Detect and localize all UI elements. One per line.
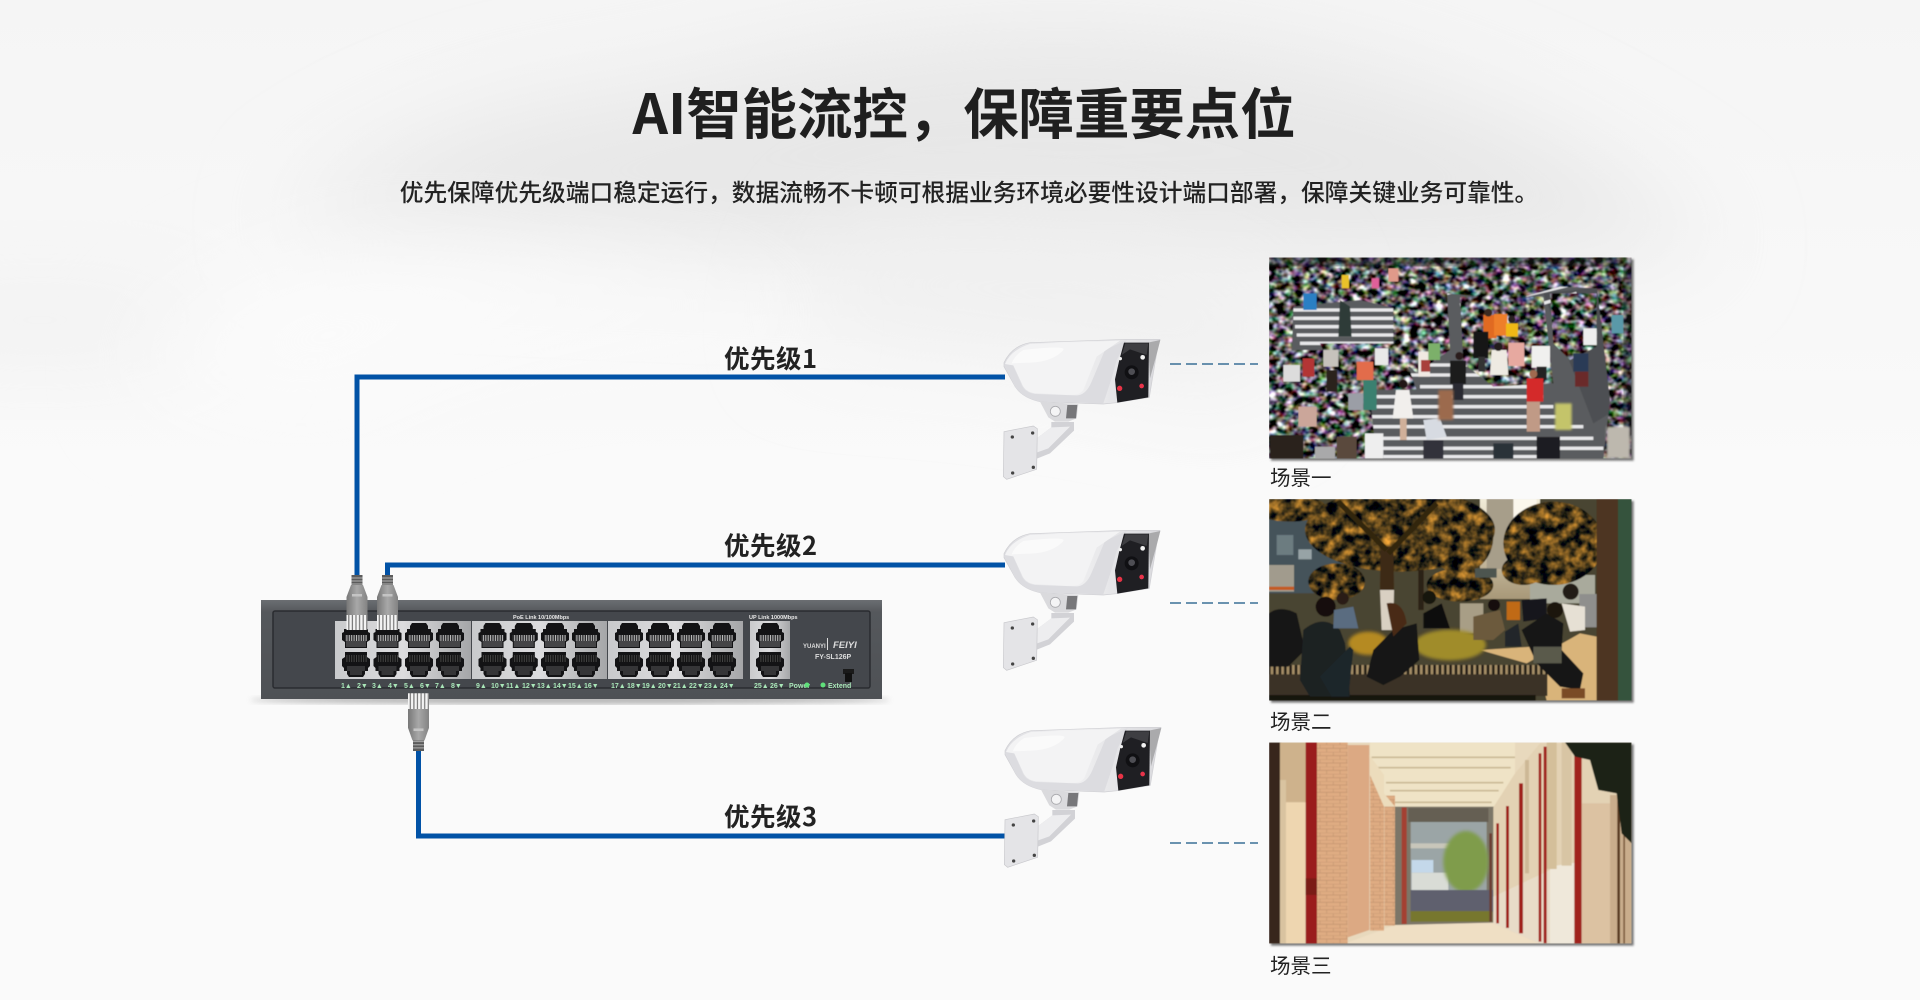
port numbers: 17▲ xyxy=(611,683,626,690)
scene 3 caption: 场景三 xyxy=(1270,949,1332,979)
port block 2 xyxy=(472,621,607,679)
camera 2 xyxy=(1003,530,1160,670)
camera 1 xyxy=(1003,339,1160,479)
brand logo: FEIYI xyxy=(833,640,857,651)
port numbers: 18▼ xyxy=(627,683,642,690)
port numbers: 25▲ xyxy=(754,683,769,690)
port numbers: 14▼ xyxy=(553,683,568,690)
panel text: UP Link 1000Mbps xyxy=(749,615,798,621)
brand logo: YUANYI xyxy=(803,644,826,650)
priority cable 3 xyxy=(418,750,1005,836)
port numbers: 12▼ xyxy=(522,683,537,690)
port numbers: 9▲ xyxy=(476,683,487,690)
camera 3 xyxy=(1004,727,1161,867)
port numbers: 20▼ xyxy=(658,683,673,690)
scene photo 3: school corridor xyxy=(1269,742,1634,946)
scene 2 caption: 场景二 xyxy=(1270,705,1332,735)
port numbers: 21▲ xyxy=(673,683,688,690)
status leds xyxy=(804,682,826,688)
port numbers: 16▼ xyxy=(584,683,599,690)
port numbers: 2▼ xyxy=(357,683,368,690)
port numbers: 26▼ xyxy=(770,683,785,690)
plug 3 xyxy=(408,693,429,751)
port numbers: 22▼ xyxy=(689,683,704,690)
port numbers: 11▲ xyxy=(506,683,520,690)
title: AI智能流控，保障重要点位 xyxy=(631,70,1296,150)
port numbers: 7▲ xyxy=(435,683,446,690)
inner front panel xyxy=(273,611,870,688)
label priority 1: 优先级1 xyxy=(724,339,818,376)
port numbers: 6▼ xyxy=(420,683,431,690)
port numbers: 24▼ xyxy=(720,683,735,690)
dashed connector 3 xyxy=(1170,842,1258,844)
label priority 2: 优先级2 xyxy=(724,526,818,563)
plug 1 xyxy=(346,575,368,630)
port numbers: 1▲ xyxy=(341,683,352,690)
port numbers: Extend xyxy=(828,683,851,690)
port numbers xyxy=(341,683,851,690)
priority cable 2 xyxy=(388,565,1005,575)
scene photo 1: crowd on crosswalk xyxy=(1269,257,1634,461)
dashed connector 1 xyxy=(1170,363,1258,365)
port numbers: Power xyxy=(789,683,810,690)
priority cable 1 xyxy=(357,377,1005,575)
port numbers: 15▲ xyxy=(568,683,583,690)
extend switch xyxy=(843,669,854,682)
panel text xyxy=(513,615,798,621)
port block 3 xyxy=(608,621,743,679)
port numbers: 13▲ xyxy=(537,683,552,690)
port block 4 uplink xyxy=(750,621,790,679)
scene photo 2: people in autumn plaza xyxy=(1269,499,1634,703)
plug 2 xyxy=(377,575,398,630)
subtitle: 优先保障优先级端口稳定运行，数据流畅不卡顿可根据业务环境必要性设计端口部署，保障关键业务可靠性。 xyxy=(400,173,1538,208)
brand logo xyxy=(803,638,857,661)
dashed connector 2 xyxy=(1170,602,1258,604)
switch shadow and body xyxy=(250,600,890,704)
port numbers: 4▼ xyxy=(388,683,399,690)
port numbers: 10▼ xyxy=(491,683,506,690)
port numbers: 8▼ xyxy=(451,683,462,690)
port numbers: 5▲ xyxy=(404,683,415,690)
brand logo: FY-SL126P xyxy=(815,654,852,661)
port block 1 xyxy=(335,621,471,679)
port numbers: 3▲ xyxy=(372,683,383,690)
label priority 3: 优先级3 xyxy=(724,797,818,834)
port numbers: 23▲ xyxy=(704,683,719,690)
port numbers: 19▲ xyxy=(642,683,657,690)
scene 1 caption: 场景一 xyxy=(1270,461,1332,491)
panel text: PoE Link 10/100Mbps xyxy=(513,615,569,621)
